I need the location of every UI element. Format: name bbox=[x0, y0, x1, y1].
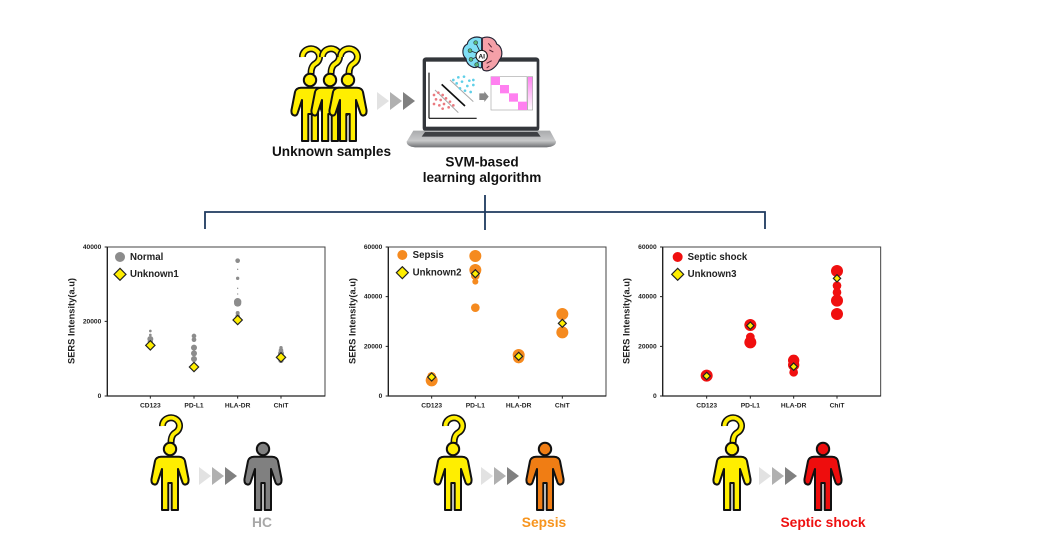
y axis labels: 60000 bbox=[638, 244, 657, 251]
category labels: HLA-DR bbox=[225, 403, 251, 410]
legend bbox=[114, 252, 179, 280]
category labels: CD123 bbox=[696, 403, 717, 410]
legend: Unknown1 bbox=[130, 269, 179, 280]
y axis labels: 0 bbox=[653, 393, 657, 400]
plot axes bbox=[429, 73, 477, 118]
arrow: to septic shock bbox=[759, 467, 797, 485]
legend bbox=[672, 252, 748, 280]
label: unknown samples: Unknown samples bbox=[272, 144, 391, 159]
category labels bbox=[140, 403, 288, 410]
y axis labels: 40000 bbox=[83, 244, 102, 251]
legend: Septic shock bbox=[688, 252, 748, 263]
unknown3 diamonds bbox=[703, 275, 841, 380]
y axis labels: 0 bbox=[98, 393, 102, 400]
y axis labels bbox=[638, 244, 657, 400]
legend: Unknown2 bbox=[413, 267, 461, 278]
septic shock points bbox=[701, 265, 843, 382]
person: septic shock red bbox=[804, 443, 842, 510]
y axis labels: 0 bbox=[379, 393, 383, 400]
AI brain bbox=[463, 37, 482, 68]
category labels: ChiT bbox=[274, 403, 288, 410]
category labels: PD-L1 bbox=[466, 403, 485, 410]
category labels bbox=[421, 403, 570, 410]
category labels: HLA-DR bbox=[506, 403, 532, 410]
legend: Unknown3 bbox=[688, 269, 737, 280]
category labels: ChiT bbox=[555, 403, 570, 410]
gray arrow bbox=[479, 91, 489, 102]
chart: septic shock vs unknown3 bbox=[621, 244, 881, 410]
person: unknown to HC bbox=[151, 418, 189, 510]
unknown2 diamonds bbox=[428, 270, 566, 381]
sepsis points bbox=[426, 250, 568, 386]
icon: laptop with SVM plot and confusion matrix bbox=[407, 37, 556, 147]
label: Sepsis: Sepsis bbox=[522, 515, 567, 530]
svm separator lines bbox=[442, 84, 465, 106]
arrow: to sepsis bbox=[481, 467, 519, 485]
category labels: CD123 bbox=[140, 403, 161, 410]
chart: sepsis vs unknown2 bbox=[347, 244, 606, 410]
y axis labels: 20000 bbox=[638, 343, 657, 350]
y axis labels: 20000 bbox=[364, 343, 383, 350]
label: SVM-based learning algorithm: learning algorithm bbox=[423, 170, 541, 185]
bracket connector bbox=[205, 195, 765, 230]
category labels: CD123 bbox=[421, 403, 442, 410]
label: Septic shock: Septic shock bbox=[780, 515, 866, 530]
icon: laptop with SVM plot and confusion matrix: AI bbox=[478, 53, 485, 60]
category labels: ChiT bbox=[830, 403, 844, 410]
label: SVM-based learning algorithm: SVM-based bbox=[445, 154, 519, 170]
y axis labels bbox=[83, 244, 102, 400]
y axis title: SERS Intensity(a.u) bbox=[67, 278, 77, 364]
svm margins bbox=[435, 80, 473, 113]
chart: normal vs unknown1 bbox=[67, 244, 325, 410]
red cluster bbox=[433, 91, 455, 110]
icon: three unknown sample people bbox=[291, 49, 367, 141]
arrow: to HC bbox=[199, 467, 237, 485]
person: sepsis orange bbox=[526, 443, 564, 510]
y axis labels: 20000 bbox=[83, 318, 102, 325]
legend: Normal bbox=[130, 252, 163, 263]
label: HC: HC bbox=[252, 515, 272, 530]
category labels: PD-L1 bbox=[741, 403, 760, 410]
y axis labels: 40000 bbox=[638, 294, 657, 301]
y axis labels: 60000 bbox=[364, 244, 383, 251]
category labels: PD-L1 bbox=[184, 403, 204, 410]
legend bbox=[396, 250, 461, 279]
y axis title: SERS Intensity(a.u) bbox=[621, 278, 631, 364]
category labels bbox=[696, 403, 844, 410]
person: unknown to septic shock bbox=[713, 418, 751, 510]
y axis labels: 40000 bbox=[364, 294, 383, 301]
y axis title: SERS Intensity(a.u) bbox=[347, 278, 357, 364]
arrow: samples to laptop bbox=[377, 92, 415, 110]
category labels: HLA-DR bbox=[781, 403, 807, 410]
person: unknown to sepsis bbox=[434, 418, 472, 510]
legend: Sepsis bbox=[413, 250, 444, 261]
y axis labels bbox=[364, 244, 383, 400]
normal points bbox=[147, 258, 284, 363]
confusion matrix bbox=[491, 77, 527, 110]
cyan cluster bbox=[452, 75, 475, 93]
person: HC gray bbox=[244, 443, 282, 510]
unknown1 diamonds bbox=[146, 315, 286, 372]
